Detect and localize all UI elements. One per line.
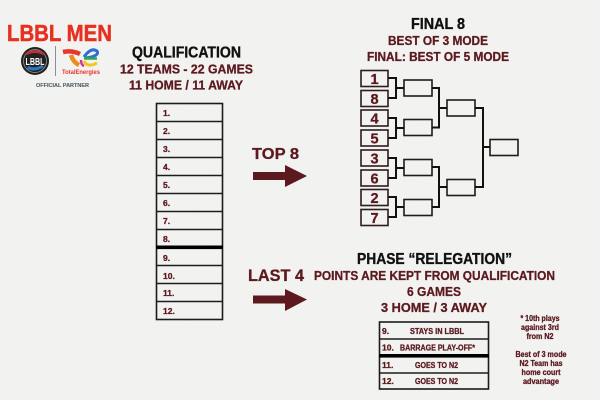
chart: tournament bracket: 1 [370, 72, 379, 88]
panel: qualification table: 7. [163, 216, 170, 226]
panel: qualification table: 4. [163, 162, 170, 172]
text block: footnote: advantage [523, 377, 559, 386]
heading: phase relegation: POINTS ARE KEPT FROM QUALIFICATION [314, 268, 555, 283]
text block: footnote: Best of 3 mode [516, 350, 567, 359]
icon: LBBL badge: LBBL [26, 57, 44, 68]
text block: footnote: against 3rd [521, 323, 559, 332]
heading: phase relegation: 3 HOME / 3 AWAY [381, 300, 487, 315]
chart: tournament bracket: 5 [370, 132, 379, 148]
heading: phase relegation: PHASE “RELEGATION” [357, 251, 512, 268]
panel: qualification table: 2. [163, 126, 170, 136]
logo group: sponsors [21, 46, 101, 89]
divider between logos [55, 46, 56, 76]
text block: footnote: from N2 [526, 332, 554, 341]
panel: qualification table: 1. [163, 108, 170, 118]
heading: phase relegation [314, 251, 555, 315]
chart: tournament bracket: 8 [370, 92, 379, 108]
heading: final 8: BEST OF 3 MODE [388, 33, 488, 48]
panel: relegation table: 9. [382, 326, 389, 336]
panel: qualification table [156, 104, 223, 320]
panel: qualification table: 8. [163, 234, 170, 244]
panel: relegation table: GOES TO N2 [415, 376, 458, 386]
panel: qualification table: 6. [163, 198, 170, 208]
heading: phase relegation: 6 GAMES [407, 284, 461, 299]
icon: TotalEnergies logo: TotalEnergies [62, 70, 101, 76]
panel: relegation table: 11. [382, 360, 393, 370]
panel: qualification table: 10. [163, 271, 175, 281]
text block: footnote: home court [522, 368, 561, 377]
heading: qualification [120, 44, 253, 92]
arrow: last 4 [253, 289, 307, 311]
heading: final 8: FINAL: BEST OF 5 MODE [367, 49, 509, 64]
text block: footnote [516, 314, 567, 386]
text block: footnote: * 10th plays [520, 314, 560, 323]
heading: final 8 [367, 16, 509, 64]
chart: tournament bracket: 4 [370, 112, 379, 128]
label: top 8: TOP 8 [252, 146, 299, 163]
text block: footnote: N2 Team has [520, 359, 563, 368]
official partner label: OFFICIAL PARTNER [36, 83, 89, 89]
panel: qualification table: 12. [163, 306, 175, 316]
chart: tournament bracket: 6 [370, 172, 379, 188]
label: last 4: LAST 4 [248, 267, 305, 285]
panel: relegation table: BARRAGE PLAY-OFF* [400, 342, 476, 352]
heading: qualification: QUALIFICATION [132, 44, 241, 62]
heading: qualification: 12 TEAMS - 22 GAMES [120, 62, 253, 76]
chart: tournament bracket: 2 [370, 191, 379, 207]
panel: qualification table: 9. [163, 253, 170, 263]
panel: relegation table: STAYS IN LBBL [410, 326, 464, 336]
panel: relegation table: 10. [382, 342, 394, 352]
arrow: top 8 [253, 165, 307, 187]
heading: final 8: FINAL 8 [411, 16, 465, 33]
heading: qualification: 11 HOME / 11 AWAY [129, 78, 243, 92]
panel: qualification table: 5. [163, 180, 170, 190]
title: LBBL MEN: LBBL MEN [7, 20, 112, 46]
chart: tournament bracket: 3 [370, 152, 379, 168]
chart: tournament bracket: 7 [370, 211, 379, 227]
panel: relegation table: 12. [382, 376, 394, 386]
panel: qualification table: 3. [163, 144, 170, 154]
panel: relegation table: GOES TO N2 [415, 360, 458, 370]
chart: tournament bracket [361, 70, 518, 227]
panel: relegation table [379, 322, 489, 389]
panel: qualification table: 11. [163, 288, 174, 298]
